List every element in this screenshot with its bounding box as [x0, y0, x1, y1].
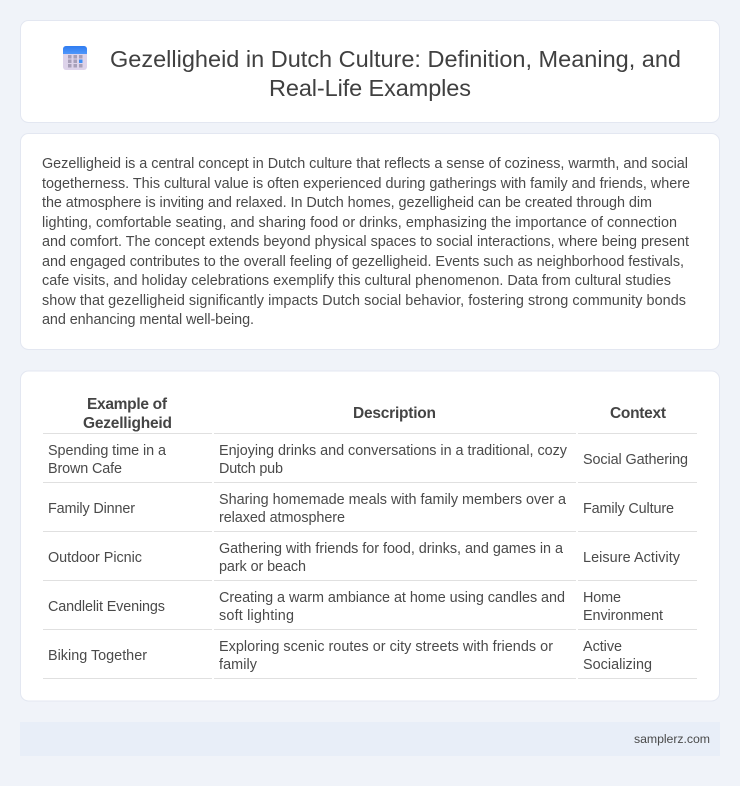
- table header: Example of: [87, 396, 168, 413]
- table row: outdoor picnic: Outdoor Picnic: [48, 550, 142, 566]
- text block: definition: the atmosphere is inviting and relaxed. In Dutch homes, gezelligheid can be created through dim: [42, 195, 652, 211]
- text block: definition: and enhancing mental well-being.: [42, 312, 254, 328]
- table row: family dinner: Sharing homemade meals with family members over a: [219, 492, 566, 508]
- table row: family dinner: [48, 492, 674, 526]
- table row: outdoor picnic: [48, 541, 681, 575]
- panel: intro paragraph: [20, 134, 720, 350]
- table row: candlelit evenings: Environment: [583, 608, 663, 624]
- table header: [83, 396, 666, 432]
- panel: examples table: [20, 371, 720, 701]
- text block: definition: and engaged contributes to the overall feeling of gezelligheid. Events such as neighborhood festivals,: [42, 254, 684, 270]
- table row: biking together: family: [219, 657, 258, 673]
- table row: outdoor picnic: park or beach: [219, 559, 306, 575]
- text block: definition: cafe visits, and holiday celebrations exemplify this cultural phenomenon. Data from cultural studies: [42, 273, 671, 289]
- table row: brown cafe: [48, 443, 688, 477]
- footer bar: [20, 722, 720, 756]
- table header: Context: [610, 405, 666, 422]
- table row: outdoor picnic: Leisure Activity: [583, 550, 681, 566]
- table row: biking together: Biking Together: [48, 648, 147, 664]
- table row: candlelit evenings: [48, 590, 663, 624]
- table header: Description: [353, 405, 436, 422]
- text block: definition: togetherness. This cultural value is often experienced during gatherings with family and friends, where: [42, 176, 690, 192]
- title: Gezelligheid in Dutch Culture: Definition, Meaning, and: [110, 46, 681, 72]
- table row: candlelit evenings: soft lighting: [219, 608, 294, 624]
- table row: biking together: Active: [583, 639, 622, 655]
- table row: candlelit evenings: Candlelit Evenings: [48, 599, 165, 615]
- title: Real-Life Examples: [269, 75, 471, 101]
- text block: definition: show that gezelligheid significantly impacts Dutch social behavior, fostering strong community bonds: [42, 293, 686, 309]
- table row: outdoor picnic: Gathering with friends for food, drinks, and games in a: [219, 541, 563, 557]
- text block: definition: and comfort. The concept extends beyond physical spaces to social interactions, where being present: [42, 234, 689, 250]
- text block: definition: Gezelligheid is a central concept in Dutch culture that reflects a sense of coziness, warmth, and social: [42, 156, 688, 172]
- table row: candlelit evenings: Home: [583, 590, 621, 606]
- table row: brown cafe: Enjoying drinks and conversations in a traditional, cozy: [219, 443, 568, 459]
- table row: family dinner: Family Culture: [583, 501, 674, 517]
- table row: family dinner: relaxed atmosphere: [219, 510, 345, 526]
- footer credit: samplerz.com: [634, 732, 710, 746]
- table row: brown cafe: Dutch pub: [219, 461, 283, 477]
- text block: definition: [42, 156, 690, 328]
- table row: candlelit evenings: Creating a warm ambiance at home using candles and: [219, 590, 565, 606]
- title: [110, 46, 681, 101]
- table row: biking together: Socializing: [583, 657, 652, 673]
- table row: brown cafe: Social Gathering: [583, 452, 688, 468]
- table row: brown cafe: Brown Cafe: [48, 461, 122, 477]
- table row: brown cafe: Spending time in a: [48, 443, 166, 459]
- panel: title card: [20, 20, 720, 122]
- table row: biking together: Exploring scenic routes or city streets with friends or: [219, 639, 553, 655]
- text block: definition: lighting, comfortable seating, and sharing food or drinks, emphasizing the importance of connection: [42, 215, 677, 231]
- table row: biking together: [48, 639, 652, 673]
- table row: family dinner: Family Dinner: [48, 501, 135, 517]
- icon: calendar: [63, 46, 87, 70]
- table header: Gezelligheid: [83, 415, 172, 432]
